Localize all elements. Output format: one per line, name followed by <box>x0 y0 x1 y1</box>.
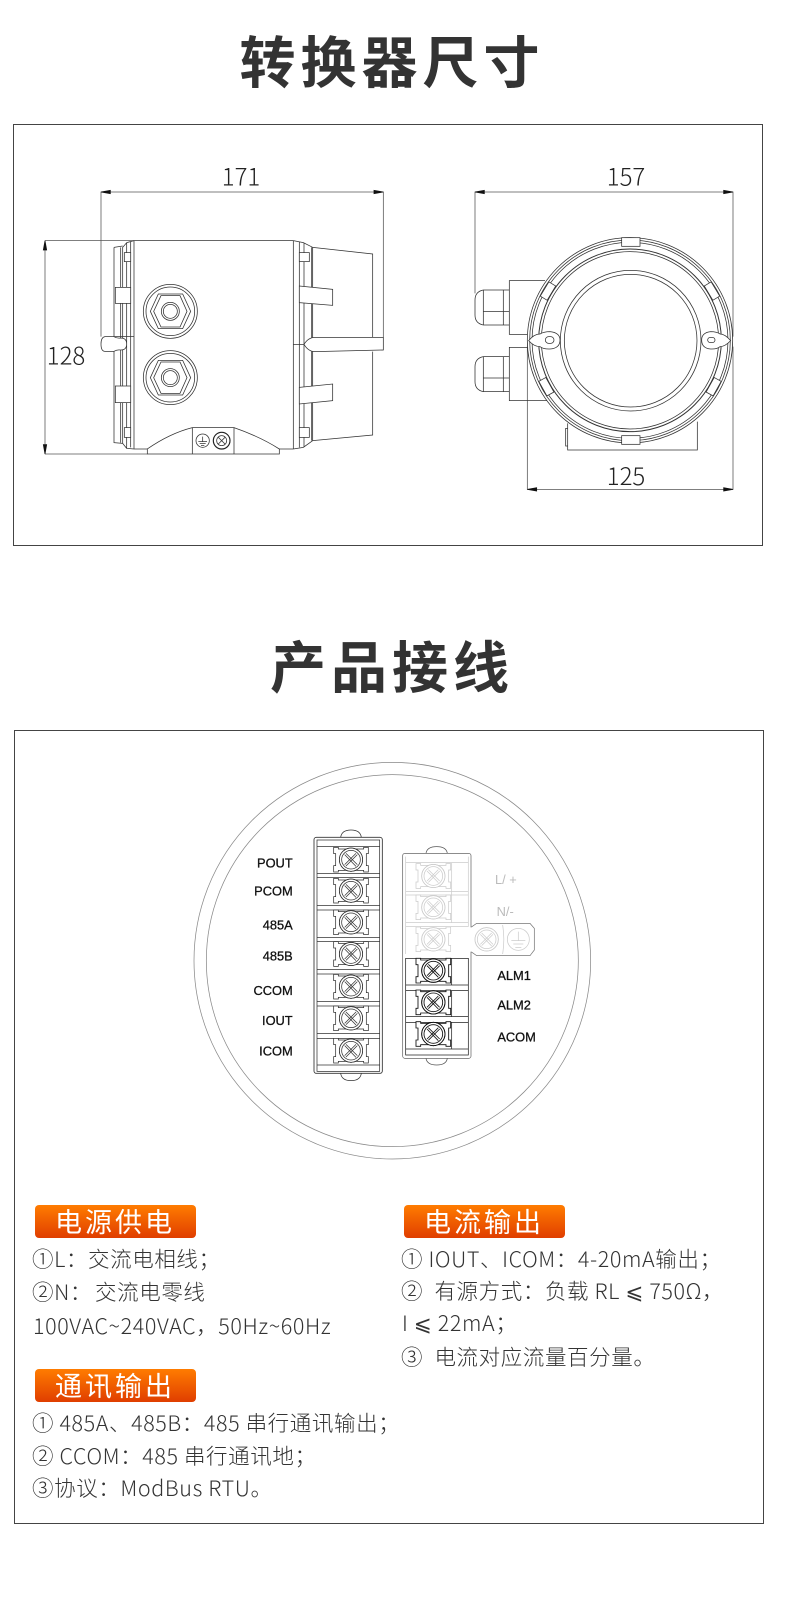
dimension line: 157: 157 <box>607 157 645 192</box>
badge: power supply <box>35 1205 196 1238</box>
title: converter dimensions: 转换器尺寸 <box>240 19 544 100</box>
outer housing circles <box>194 762 591 1159</box>
dimension line: 171 <box>101 157 383 337</box>
mounting base with earth terminal <box>147 428 279 454</box>
text: power supply line 2: ②N：交流电零线 <box>32 1276 206 1307</box>
dimension line: 128 <box>43 241 147 454</box>
text: power supply line 1: ①L：交流电相线； <box>32 1243 221 1274</box>
text: communication line 2: ② CCOM：485 串行通讯地； <box>32 1440 317 1471</box>
dimension line: 157 <box>475 157 733 337</box>
text: power supply line 3: 100VAC~240VAC，50Hz~60Hz <box>33 1310 331 1341</box>
title: product wiring: 产品接线 <box>270 624 514 705</box>
right strip labels: ACOM <box>497 1030 536 1045</box>
panel: wiring frame <box>14 730 764 1524</box>
left terminal strip <box>314 830 382 1081</box>
rear cover <box>101 247 383 441</box>
text: communication line 3: ③协议：ModBus RTU。 <box>32 1472 273 1503</box>
wiring diagram <box>194 762 591 1159</box>
cover screw ears <box>529 332 731 349</box>
earth lug <box>471 923 534 956</box>
left strip labels <box>253 856 293 1058</box>
cover rings <box>527 238 733 443</box>
text: current line 4: ③ 电流对应流量百分量。 <box>401 1341 655 1372</box>
left strip labels: 485B <box>263 949 293 964</box>
left strip labels: IOUT <box>262 1013 293 1028</box>
left strip labels: 485A <box>263 917 293 932</box>
badge: communication output: 通讯输出 <box>55 1365 175 1404</box>
badge: current output <box>404 1205 565 1238</box>
cable entry housings <box>475 281 547 401</box>
text: current line 1: ① IOUT、ICOM：4-20mA输出； <box>401 1243 722 1274</box>
right strip labels: ALM1 <box>497 968 531 983</box>
dimension line: 128: 128 <box>47 337 85 372</box>
dimension line: 125: 125 <box>607 457 645 492</box>
bottom mount <box>566 422 697 450</box>
left strip labels: PCOM <box>254 884 293 899</box>
dimension line: 125 <box>527 347 733 492</box>
drawing: side view with dimensions 171 and 128 <box>43 157 383 454</box>
cover tabs <box>539 238 721 444</box>
badge: power supply: 电源供电 <box>55 1201 175 1240</box>
right strip labels: ALM2 <box>497 997 531 1012</box>
right strip labels: L/ + <box>495 872 517 887</box>
text: current line 2: ② 有源方式：负载 RL ⩽ 750Ω， <box>401 1275 724 1306</box>
badge: current output: 电流输出 <box>424 1201 544 1240</box>
panel: dimensions frame <box>13 124 763 546</box>
text: current line 3: I ⩽ 22mA； <box>402 1307 517 1338</box>
left strip labels: ICOM <box>259 1043 293 1058</box>
badge: communication output <box>35 1369 196 1402</box>
housing body <box>114 241 313 449</box>
dimension line: 171: 171 <box>222 157 260 192</box>
right strip labels: N/- <box>497 904 514 919</box>
drawing: front view with dimensions 157 and 125 <box>475 157 733 492</box>
right strip labels <box>495 872 536 1045</box>
right terminal strip <box>403 847 534 1065</box>
left strip labels: POUT <box>257 856 293 871</box>
text: communication line 1: ① 485A、485B：485 串行通讯输出； <box>32 1407 400 1438</box>
left strip labels: CCOM <box>253 983 293 998</box>
cable glands <box>143 284 197 405</box>
